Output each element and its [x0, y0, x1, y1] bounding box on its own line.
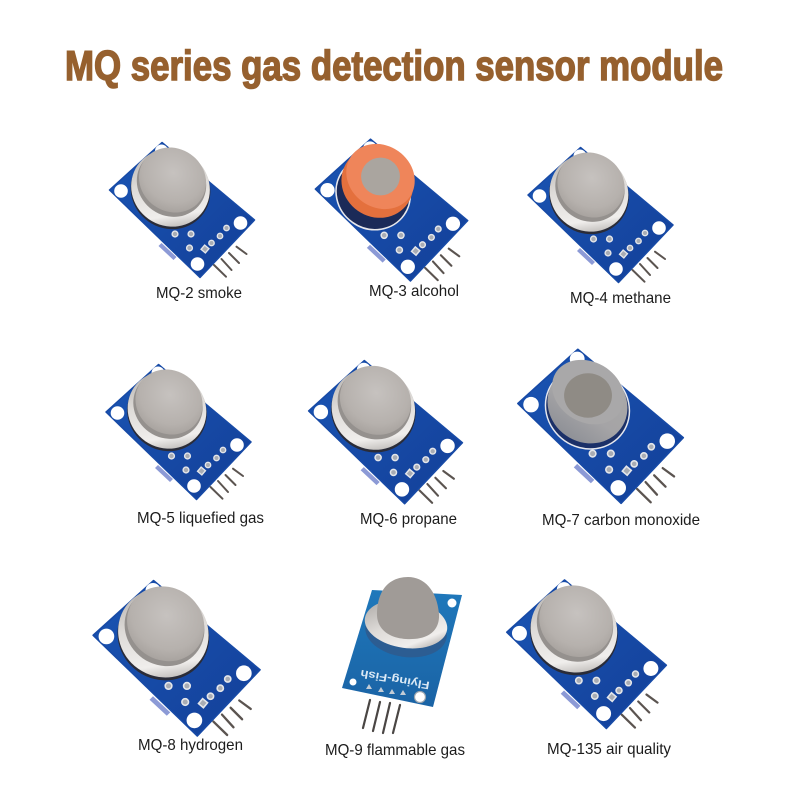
module: MQ-2 smoke [110, 134, 254, 302]
label: MQ-8 hydrogen: MQ-8 hydrogen [138, 737, 243, 754]
module: MQ-6 propane [309, 351, 462, 528]
photo: MQ-5 sensor board [106, 356, 251, 500]
module: MQ-4 methane [528, 139, 673, 307]
module: MQ-9 flammable gas [325, 577, 465, 759]
photo: MQ-8 sensor board [93, 571, 260, 736]
photo: MQ-9 sensor board, upright [342, 577, 462, 733]
label: MQ-6 propane: MQ-6 propane [360, 511, 457, 528]
label: MQ-2 smoke: MQ-2 smoke [156, 285, 242, 302]
photo: MQ-2 sensor board [110, 134, 254, 278]
photo: MQ-9 sensor board, upright: Flying-Fish [359, 667, 431, 691]
photo: MQ-3 sensor board with orange cap [315, 131, 468, 281]
module: MQ-5 liquefied gas [106, 356, 264, 527]
label: MQ-4 methane: MQ-4 methane [570, 290, 671, 307]
label: MQ-135 air quality: MQ-135 air quality [547, 741, 671, 758]
photo: MQ-7 sensor board with grey cap [518, 347, 683, 503]
label: MQ-5 liquefied gas: MQ-5 liquefied gas [137, 510, 264, 527]
module: MQ-135 air quality [507, 571, 671, 758]
label: MQ-9 flammable gas: MQ-9 flammable gas [325, 742, 465, 759]
module: MQ-8 hydrogen [93, 571, 260, 754]
photo: MQ-6 sensor board [309, 351, 462, 504]
label: MQ-3 alcohol: MQ-3 alcohol [369, 283, 459, 300]
photo: MQ-135 sensor board [507, 571, 666, 728]
module: MQ-3 alcohol [315, 131, 468, 300]
module: MQ-7 carbon monoxide [518, 347, 700, 529]
label: MQ-7 carbon monoxide: MQ-7 carbon monoxide [542, 512, 700, 529]
photo: MQ-4 sensor board [528, 139, 673, 282]
